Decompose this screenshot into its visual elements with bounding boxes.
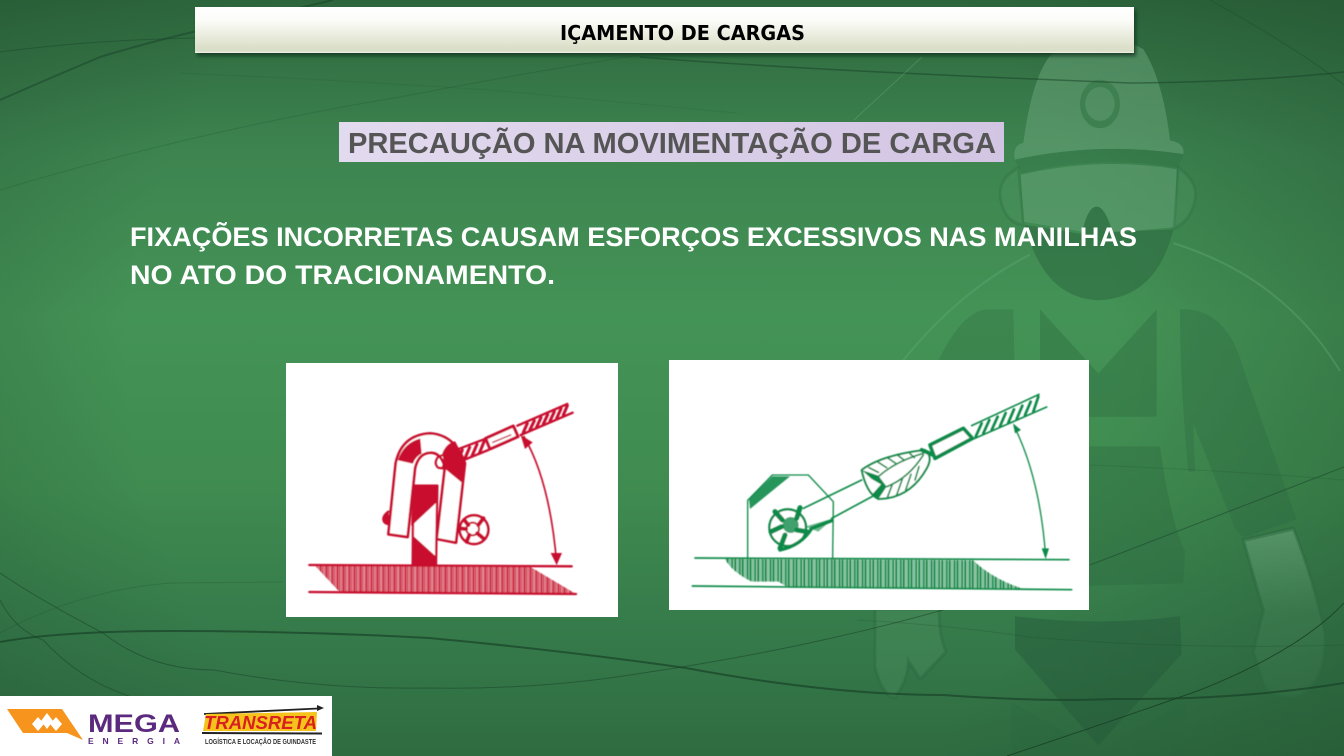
title bar [195,7,1136,56]
rope ferrule [930,428,972,458]
wire rope [972,394,1047,439]
shackle arm [803,480,875,518]
logo: Transreta: TRANSRETA [204,713,317,733]
body statement [130,221,1137,290]
rope ferrule [486,426,518,449]
panel: correct shackle fixing (green) [669,360,1089,610]
logo panel [0,696,332,756]
anchor block [748,475,833,558]
title text: IÇAMENTO DE CARGAS [560,21,805,45]
body statement: NO ATO DO TRACIONAMENTO. [130,260,555,290]
ground hatch [725,559,1023,589]
background: safety worker silhouette [870,38,1340,756]
shackle eye and nut [769,509,806,546]
shackle centre plate [413,486,437,565]
body statement: FIXAÇÕES INCORRETAS CAUSAM ESFORÇOS EXCESSIVOS NAS MANILHAS [130,221,1137,252]
shackle pin boss [383,512,390,524]
logo: Mega Energia: MEGA [88,710,180,738]
shackle nut [460,515,488,544]
logo: Mega Energia [7,709,180,746]
ground hatch [315,566,577,594]
panel: incorrect shackle fixing (red) [286,363,618,617]
wire rope [438,404,573,468]
subtitle banner [339,122,1004,162]
rope thimble loop [862,450,930,499]
logo: Transreta: LOGÍSTICA E LOCAÇÃO DE GUINDASTE [205,737,316,746]
angle arrow [524,437,557,563]
logo: Transreta [202,705,324,746]
subtitle text: PRECAUÇÃO NA MOVIMENTAÇÃO DE CARGA [348,126,996,160]
shackle body [388,433,465,543]
logo: Mega Energia: ENERGIA [88,736,180,746]
angle arrow [1014,427,1046,557]
